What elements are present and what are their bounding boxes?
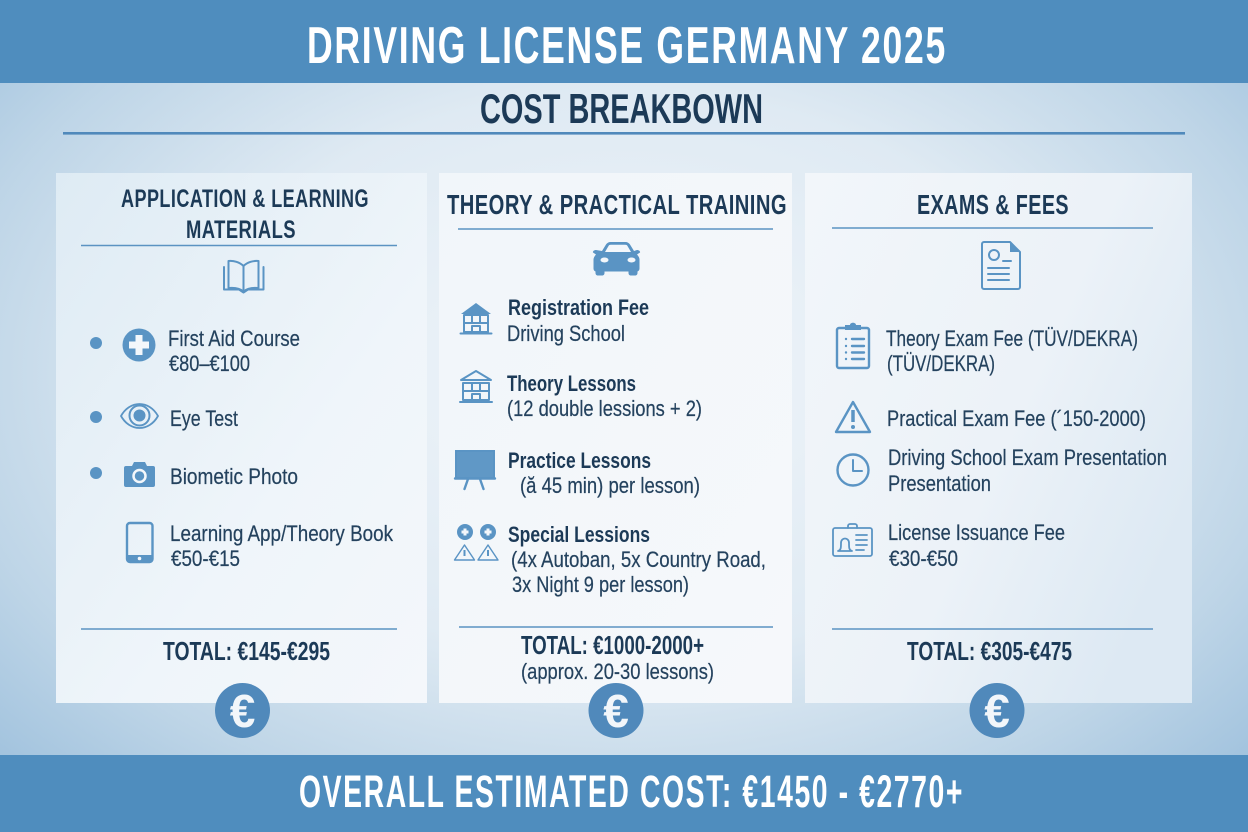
item: special lessons: Special Lessions: [508, 522, 650, 547]
heading: application: APPLICATION & LEARNING: [121, 185, 369, 213]
icon: document: [982, 242, 1020, 289]
item: special lessons: 3x Night 9 per lesson): [512, 572, 689, 597]
icon: euro coin 1: €: [230, 685, 255, 737]
item: biometric photo: Biometic Photo: [170, 464, 298, 489]
item: license issuance fee: License Issuance Fee: [888, 520, 1065, 545]
item: first aid course: First Aid Course: [168, 326, 300, 351]
icon: euro coin 1: [215, 683, 270, 738]
total: application: TOTAL: €145-€295: [163, 636, 330, 666]
icon: euro coin 2: [588, 683, 644, 738]
icon: car: [593, 242, 640, 276]
item: exam presentation: [838, 445, 1167, 496]
item: theory exam fee: Theory Exam Fee (TÜV/DEKRA): [886, 326, 1138, 351]
icon: euro coin 3: €: [984, 685, 1010, 737]
item: special lessons: [454, 522, 766, 597]
item: registration fee: Driving School: [507, 321, 625, 346]
heading: theory: THEORY & PRACTICAL TRAINING: [447, 189, 787, 220]
subtitle: COST BREAKBOWN: [480, 85, 763, 132]
item: learning app: Learning App/Theory Book: [170, 521, 394, 546]
item: exam presentation: Driving School Exam Presentation: [888, 445, 1167, 470]
item: learning app: €50-€15: [171, 546, 240, 571]
item: practical exam fee: Practical Exam Fee (´150-2000): [887, 406, 1146, 431]
item: first aid course: [90, 326, 300, 376]
item: theory exam fee: [837, 323, 1138, 376]
total: theory: [459, 627, 773, 684]
item: practical exam fee: [836, 402, 1146, 432]
item: first aid course: €80–€100: [169, 351, 250, 376]
item: practice lessons: (ă 45 min) per lesson): [520, 473, 700, 498]
icon: euro coin 2: €: [603, 685, 629, 737]
heading: application: MATERIALS: [186, 216, 296, 244]
header band: [0, 0, 1248, 83]
item: registration fee: Registration Fee: [508, 295, 649, 320]
total: theory: (approx. 20-30 lessons): [521, 659, 714, 684]
panel: theory and practical training: [439, 173, 792, 703]
item: theory lessons: Theory Lessons: [507, 371, 636, 396]
item: theory exam fee: (TÜV/DEKRA): [887, 351, 995, 376]
icon: euro coin 3: [970, 683, 1024, 738]
item: theory lessons: [460, 371, 702, 421]
heading: application: [81, 185, 397, 246]
item: license issuance fee: [833, 520, 1065, 571]
item: practice lessons: Practice Lessons: [508, 448, 651, 473]
total: theory: TOTAL: €1000-2000+: [521, 630, 704, 660]
item: learning app: [127, 521, 394, 571]
item: theory lessons: (12 double lessions + 2): [507, 396, 702, 421]
panel: application and learning materials: [56, 173, 427, 703]
item: eye test: [90, 404, 238, 431]
title: DRIVING LICENSE GERMANY 2025: [307, 17, 947, 75]
item: biometric photo: [90, 462, 298, 489]
item: license issuance fee: €30-€50: [889, 546, 958, 571]
heading: exams: EXAMS & FEES: [917, 189, 1069, 220]
item: eye test: Eye Test: [170, 406, 238, 431]
total: exams: TOTAL: €305-€475: [907, 636, 1072, 666]
item: exam presentation: Presentation: [888, 471, 991, 496]
panel: exams and fees: [805, 173, 1192, 703]
footer band: [0, 755, 1248, 832]
item: special lessons: (4x Autoban, 5x Country Road,: [511, 547, 766, 572]
icon: open book: [224, 261, 264, 292]
item: registration fee: [460, 295, 649, 346]
item: practice lessons: [455, 448, 700, 498]
